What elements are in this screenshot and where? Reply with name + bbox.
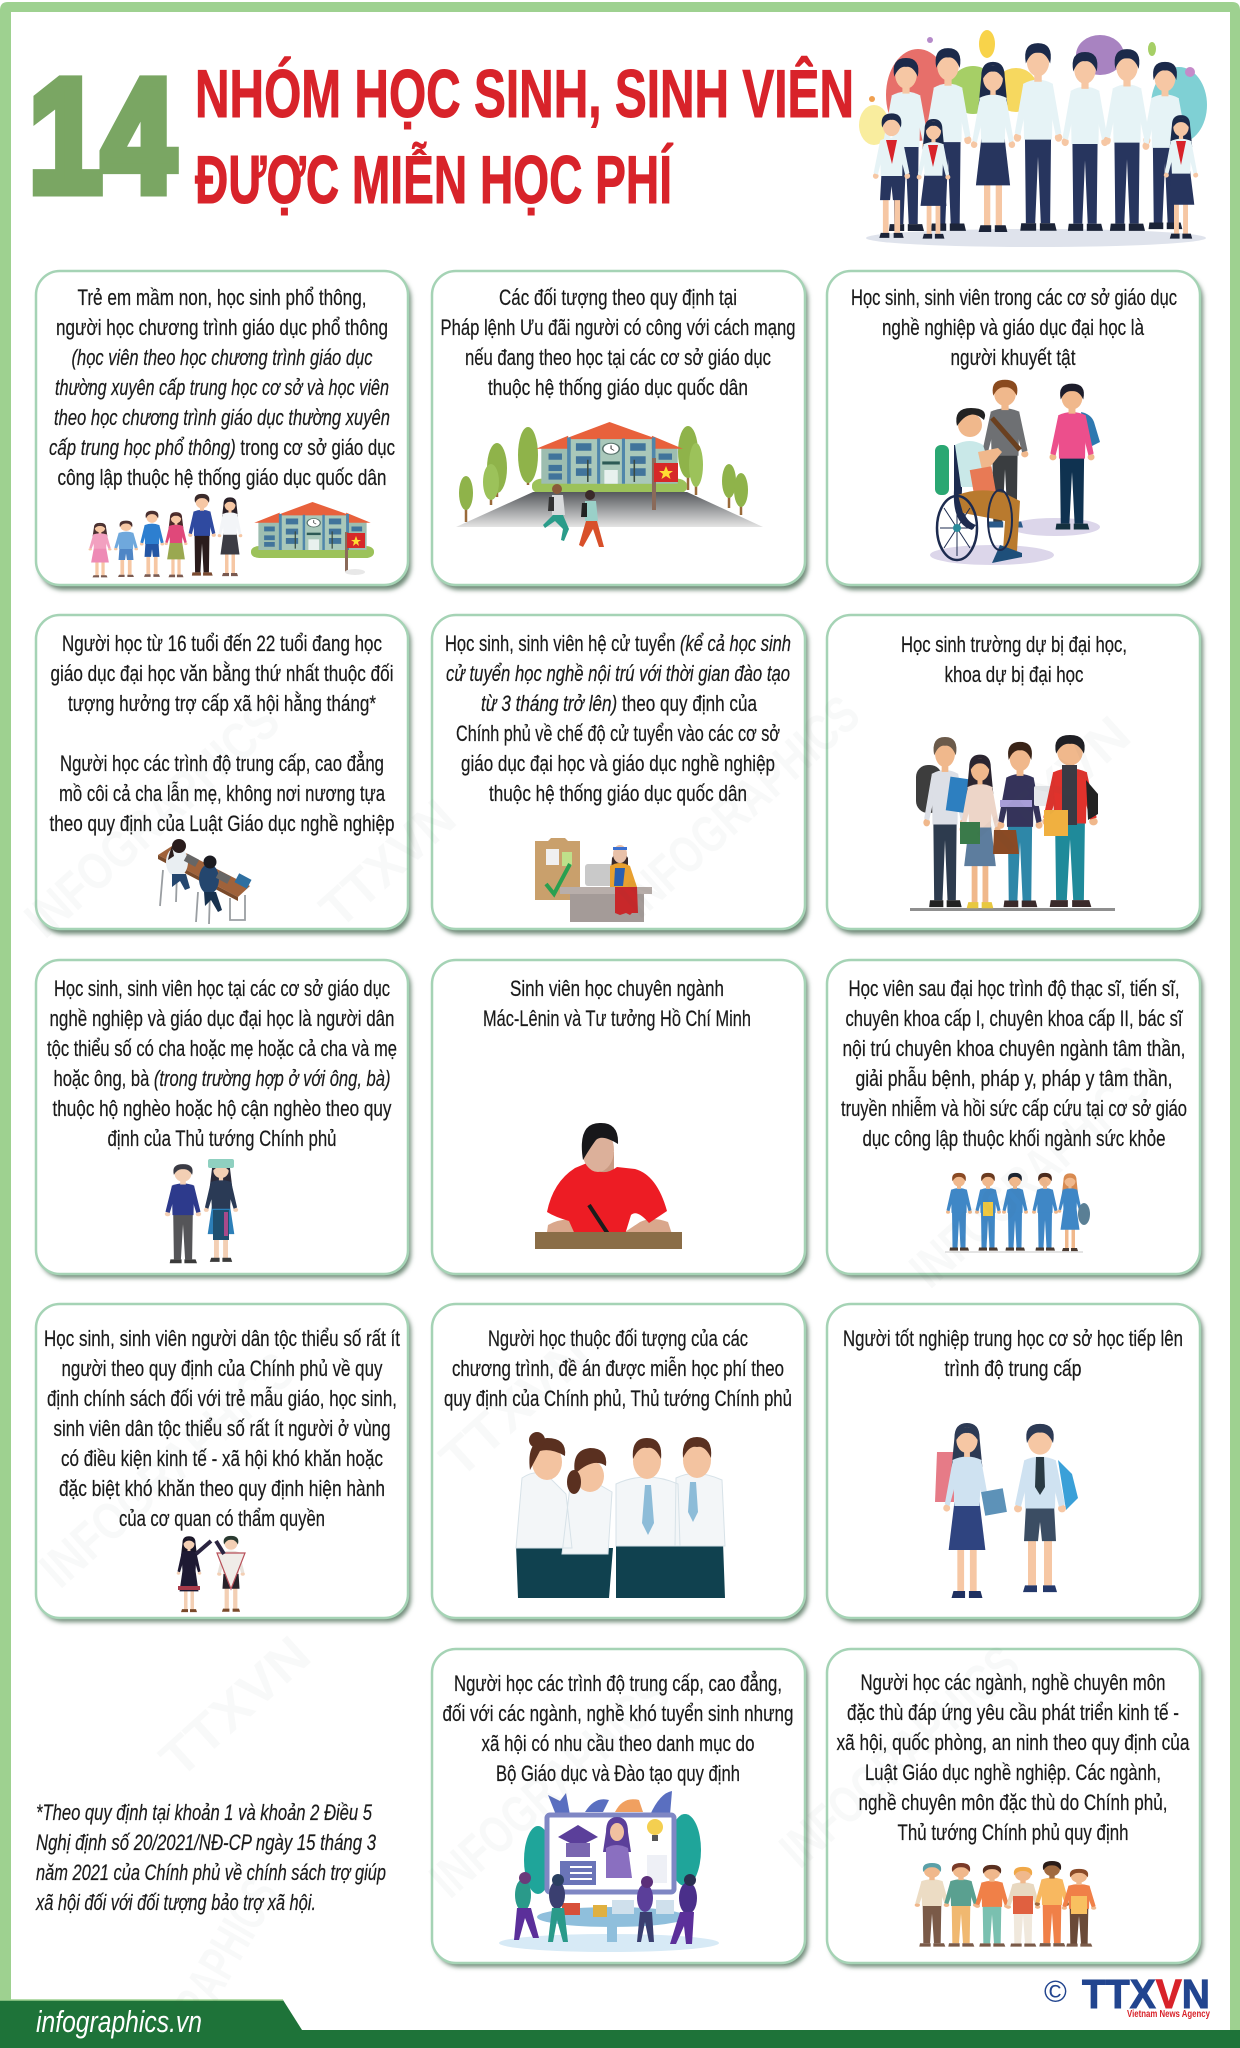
footnote: *Theo quy định tại khoản 1 và khoản 2 Điều 5 — [36, 1800, 373, 1825]
footnote: xã hội đối với đối tượng bảo trợ xã hội. — [35, 1890, 316, 1915]
text: group 1: theo học chương trình giáo dục thường xuyên — [54, 405, 390, 430]
text: group 13: Người học các trình độ trung cấp, cao đẳng, — [454, 1671, 782, 1696]
panel: group 12 lower secondary graduates — [827, 1304, 1203, 1622]
illustration: group of students — [859, 30, 1207, 247]
panel: group 11 tuition-free programs — [432, 1304, 808, 1622]
text: group 4 — [50, 631, 394, 836]
text: group 10: người theo quy định của Chính phủ về quy — [62, 1356, 382, 1381]
text: group 6 — [901, 632, 1127, 687]
text: group 11 — [444, 1326, 792, 1411]
watermark: TTXVN — [309, 789, 467, 939]
panel: group 6 pre-university students — [827, 615, 1203, 934]
text: group 1 — [49, 285, 395, 490]
title: NHÓM HỌC SINH, SINH VIÊN — [195, 55, 854, 132]
text: group 10: Học sinh, sinh viên người dân tộc thiểu số rất ít — [44, 1326, 400, 1351]
text: group 8 — [483, 976, 751, 1031]
panel: group 1 preschool and general students — [36, 271, 411, 590]
watermark: INFOGRAPHICS — [769, 1635, 1031, 1879]
text: group 7: tộc thiểu số có cha hoặc mẹ hoặc cả cha và mẹ — [47, 1036, 397, 1061]
title: ĐƯỢC MIỄN HỌC PHÍ — [195, 141, 673, 218]
text: group 11: Người học thuộc đối tượng của các — [488, 1326, 748, 1351]
illustration: online classroom and meeting table — [499, 1791, 719, 1952]
text: group 5: giáo dục đại học và giáo dục nghề nghiệp — [461, 751, 775, 776]
watermark: TTXVN — [969, 705, 1142, 869]
text: group 7 — [47, 976, 397, 1151]
illustration: school with trees, road and students — [456, 422, 763, 547]
illustration: two students at desks — [158, 839, 252, 924]
panel: group 2 revolution contributors — [432, 271, 808, 590]
text: group 1: người học chương trình giáo dục phổ thông — [56, 315, 388, 340]
text: group 4: giáo dục đại học văn bằng thứ nhất thuộc đối — [50, 661, 394, 686]
watermark: GRAPHICS — [150, 1869, 290, 2048]
text: group 4: theo quy định của Luật Giáo dục nghề nghiệp — [50, 811, 394, 836]
text: group 5: Học sinh, sinh viên hệ cử tuyển (kể cả học sinh — [445, 631, 791, 656]
watermark: INFOGRAPHICS — [609, 685, 871, 929]
text: group 2: nếu đang theo học tại các cơ sở giáo dục — [465, 345, 771, 370]
text: group 7: hoặc ông, bà (trong trường hợp ở với ông, bà) — [54, 1066, 390, 1091]
text: group 7: thuộc hộ nghèo hoặc hộ cận nghèo theo quy — [52, 1096, 392, 1121]
illustration: folder, check mark and sewing worker — [535, 838, 652, 922]
text: group 12: trình độ trung cấp — [944, 1356, 1082, 1381]
panel: group 14 specialised majors — [827, 1649, 1203, 1967]
text: group 13: đối với các ngành, nghề khó tuyển sinh nhưng — [442, 1701, 794, 1726]
text: group 5 — [445, 631, 791, 806]
footnote — [35, 1800, 386, 1915]
text: group 10: sinh viên dân tộc thiểu số rất ít người ở vùng — [54, 1416, 390, 1441]
illustration: four students — [910, 735, 1115, 911]
text: group 1: Trẻ em mầm non, học sinh phổ thông, — [78, 285, 366, 310]
illustration: ethnic minority couple — [165, 1159, 238, 1263]
big number 14: 14 — [29, 46, 175, 225]
illustration: children and school — [89, 494, 374, 577]
text: group 8: Sinh viên học chuyên ngành — [510, 976, 724, 1001]
text: group 3 — [851, 285, 1177, 370]
text: group 1: cấp trung học phổ thông) trong cơ sở giáo dục — [49, 435, 395, 460]
text: group 10: của cơ quan có thẩm quyền — [119, 1506, 325, 1531]
text: group 10 — [44, 1326, 400, 1531]
text: group 10: định chính sách đối với trẻ mẫu giáo, học sinh, — [47, 1386, 397, 1411]
watermark — [14, 685, 1161, 2048]
text: group 2 — [440, 285, 796, 400]
title — [195, 55, 854, 218]
text: group 2: Pháp lệnh Ưu đãi người có công với cách mạng — [440, 315, 796, 340]
footer bar and site label — [0, 2000, 1240, 2048]
text: group 4: Người học các trình độ trung cấp, cao đẳng — [60, 751, 384, 776]
text: group 5: thuộc hệ thống giáo dục quốc dân — [489, 781, 747, 806]
footer bar and site label: infographics.vn — [36, 2004, 202, 2039]
panel: group 10 very small ethnic minority students — [36, 1304, 411, 1622]
text: group 1: thường xuyên cấp trung học cơ sở và học viên — [55, 375, 389, 400]
text: group 6: khoa dự bị đại học — [944, 662, 1084, 687]
text: group 8: Mác-Lênin và Tư tưởng Hồ Chí Minh — [483, 1006, 751, 1031]
illustration: student writing at desk — [535, 1123, 682, 1249]
logo: TTXVN: TTXVN — [1082, 1971, 1210, 2017]
text: group 5: từ 3 tháng trở lên) theo quy định của — [481, 691, 758, 716]
text: group 10: có điều kiện kinh tế - xã hội khó khăn hoặc — [61, 1446, 383, 1471]
panel: group 13 hard-to-recruit majors — [432, 1649, 808, 1967]
text: group 2: thuộc hệ thống giáo dục quốc dân — [488, 375, 748, 400]
illustration: ethnic minority pair holding hands — [177, 1536, 245, 1612]
text: group 7: định của Thủ tướng Chính phủ — [108, 1126, 336, 1151]
text: group 5: Chính phủ về chế độ cử tuyển vào các cơ sở — [456, 721, 780, 746]
watermark: TTXVN — [149, 1625, 322, 1789]
text: group 4: mồ côi cả cha lẫn mẹ, không nơi nương tựa — [59, 781, 386, 806]
text: group 7: Học sinh, sinh viên học tại các cơ sở giáo dục — [54, 976, 390, 1001]
text: group 1: công lập thuộc hệ thống giáo dục quốc dân — [58, 465, 386, 490]
panel: group 5 nominated students — [432, 615, 808, 934]
text: group 9 — [841, 976, 1187, 1151]
panel: group 9 postgraduate medical students — [827, 960, 1203, 1278]
watermark: TTXVN — [429, 1325, 602, 1489]
illustration: student in wheelchair and friends — [930, 380, 1100, 565]
watermark: INFOGRAPHICS — [899, 1055, 1161, 1299]
illustration: six young people — [915, 1861, 1096, 1947]
text: group 13: Bộ Giáo dục và Đào tạo quy định — [496, 1761, 740, 1786]
panel: group 7 poor ethnic minority students — [36, 960, 411, 1278]
text: group 2: Các đối tượng theo quy định tại — [499, 285, 737, 310]
footnote: Nghị định số 20/2021/NĐ-CP ngày 15 tháng 3 — [36, 1830, 377, 1855]
text: group 3: nghề nghiệp và giáo dục đại học là — [882, 315, 1145, 340]
text: group 5: cử tuyển học nghề nội trú với thời gian đào tạo — [446, 661, 790, 686]
illustration: two secondary school students — [935, 1423, 1078, 1598]
panel: group 8 Marxism-Leninism majors — [432, 960, 808, 1278]
text: group 14: Thủ tướng Chính phủ quy định — [898, 1820, 1128, 1845]
text: group 11: chương trình, đề án được miễn học phí theo — [452, 1356, 784, 1381]
illustration: five medical students — [945, 1173, 1090, 1253]
text: group 6: Học sinh trường dự bị đại học, — [901, 632, 1127, 657]
illustration: four students in white shirts — [516, 1432, 725, 1598]
text: group 14 — [836, 1670, 1190, 1845]
text: group 3: người khuyết tật — [950, 345, 1076, 370]
text: group 12 — [843, 1326, 1183, 1381]
text: group 10: đặc biệt khó khăn theo quy định hiện hành — [59, 1476, 385, 1501]
text: group 7: nghề nghiệp và giáo dục đại học là người dân — [50, 1006, 394, 1031]
watermark: INFOGRAPHICS — [14, 692, 291, 949]
watermark: INFOGRAPHICS — [29, 1342, 306, 1599]
text: group 1: (học viên theo học chương trình giáo dục — [72, 345, 372, 370]
logo: TTXVN: © — [1044, 1974, 1067, 2009]
text: group 4: tượng hưởng trợ cấp xã hội hằng tháng* — [68, 691, 376, 716]
logo: TTXVN: Vietnam News Agency — [1127, 2009, 1210, 2020]
panel: group 4 social support recipients and orphans — [36, 615, 411, 934]
text: group 11: quy định của Chính phủ, Thủ tướng Chính phủ — [444, 1386, 792, 1411]
text: group 13 — [442, 1671, 794, 1786]
text: group 4: Người học từ 16 tuổi đến 22 tuổi đang học — [62, 631, 382, 656]
footnote: năm 2021 của Chính phủ về chính sách trợ giúp — [36, 1860, 386, 1885]
text: group 13: xã hội có nhu cầu theo danh mục do — [482, 1731, 754, 1756]
panel: group 3 students with disabilities — [827, 271, 1203, 590]
watermark: INFOGRAPHICS — [419, 1665, 681, 1909]
